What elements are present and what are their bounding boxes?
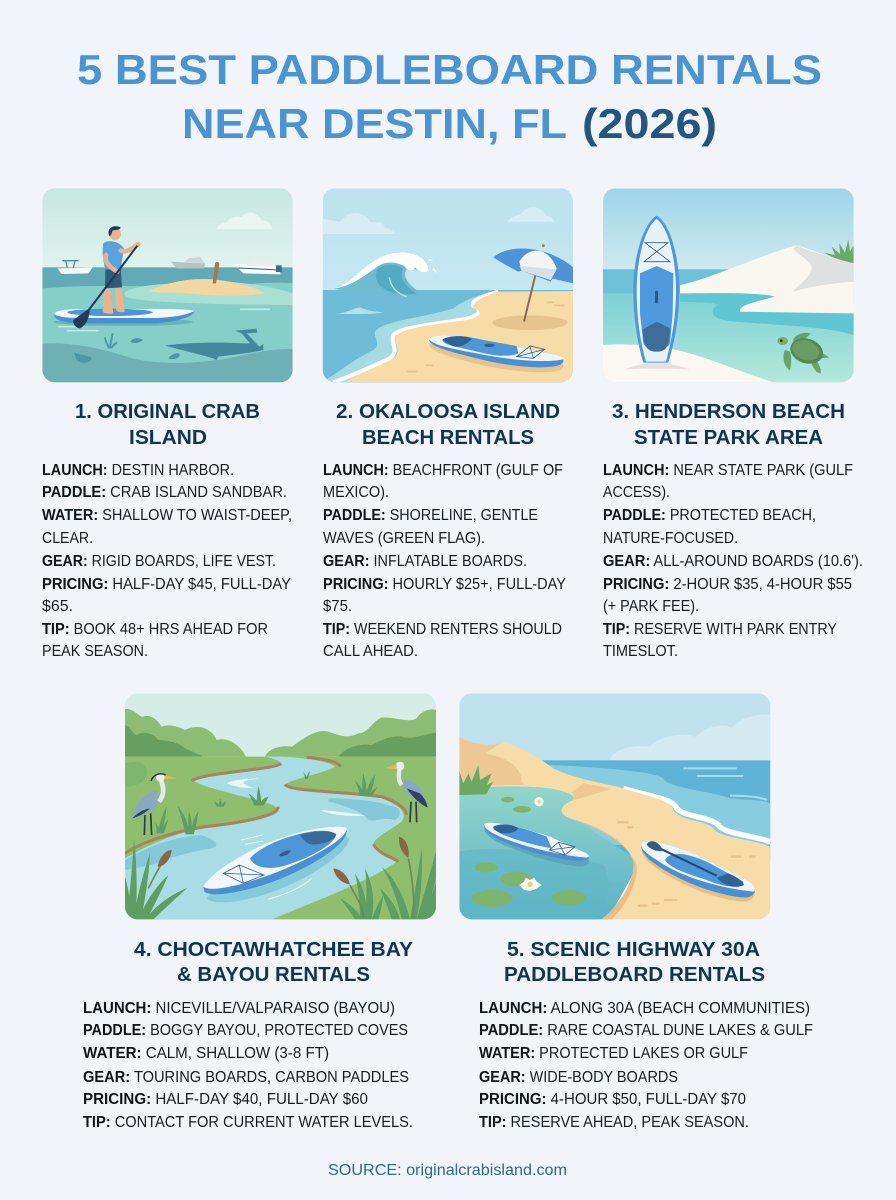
listing 5: Scenic Highway 30A xyxy=(479,938,813,1131)
details: PADDLE: CRAB ISLAND SANDBAR. xyxy=(42,484,287,501)
details: WATER: CALM, SHALLOW (3-8 FT) xyxy=(83,1045,329,1062)
heading xyxy=(134,938,413,986)
paddleboard in river xyxy=(203,827,349,902)
heron right xyxy=(384,762,428,822)
reeds and grass xyxy=(125,762,436,919)
title: (2026) xyxy=(582,100,717,147)
heron left xyxy=(132,773,178,835)
listing 4: Choctawhatchee Bay xyxy=(83,938,413,1131)
details: WAVES (GREEN FLAG). xyxy=(323,530,485,547)
details xyxy=(42,462,292,660)
paddler xyxy=(73,226,138,328)
details: TIP: RESERVE WITH PARK ENTRY xyxy=(603,621,837,638)
source credit: SOURCE: originalcrabisland.com xyxy=(328,1162,567,1179)
details: GEAR: WIDE-BODY BOARDS xyxy=(479,1069,678,1086)
sea turtle xyxy=(777,333,829,373)
details: GEAR: INFLATABLE BOARDS. xyxy=(323,553,527,570)
details: PADDLE: BOGGY BAYOU, PROTECTED COVES xyxy=(83,1022,408,1039)
details xyxy=(323,462,566,660)
listing 1: Original Crab Island xyxy=(42,400,292,660)
heading: 2. OKALOOSA ISLAND xyxy=(336,400,560,423)
listing 2: Okaloosa Island xyxy=(323,400,566,660)
details: PADDLE: SHORELINE, GENTLE xyxy=(323,507,538,524)
details: GEAR: ALL-AROUND BOARDS (10.6'). xyxy=(603,553,863,570)
details: TIP: BOOK 48+ HRS AHEAD FOR xyxy=(42,621,268,638)
details: PRICING: HALF-DAY $45, FULL-DAY xyxy=(42,576,291,593)
details: PRICING: 4-HOUR $50, FULL-DAY $70 xyxy=(479,1091,746,1108)
heading xyxy=(336,400,560,449)
details: PRICING: HALF-DAY $40, FULL-DAY $60 xyxy=(83,1091,368,1108)
details xyxy=(603,462,863,660)
heading: 4. CHOCTAWHATCHEE BAY xyxy=(134,938,413,961)
illustration: Henderson Beach dunes xyxy=(603,188,854,383)
heading xyxy=(75,400,260,449)
heading: ISLAND xyxy=(129,426,207,449)
details: LAUNCH: DESTIN HARBOR. xyxy=(42,462,234,479)
illustration: Okaloosa Island beach xyxy=(323,188,573,383)
illustration: Choctawhatchee bayou xyxy=(125,693,436,920)
paddleboard on water xyxy=(484,823,589,867)
heading xyxy=(504,938,765,986)
heading: BEACH RENTALS xyxy=(362,426,534,449)
details xyxy=(83,1000,413,1131)
details: PRICING: 2-HOUR $35, 4-HOUR $55 xyxy=(603,576,852,593)
heading: 5. SCENIC HIGHWAY 30A xyxy=(507,938,760,961)
paddleboard xyxy=(54,309,195,323)
details: $75. xyxy=(323,598,352,615)
details: PRICING: HOURLY $25+, FULL-DAY xyxy=(323,576,566,593)
details: NATURE-FOCUSED. xyxy=(603,530,738,547)
heading xyxy=(612,400,845,449)
details: PADDLE: RARE COASTAL DUNE LAKES & GULF xyxy=(479,1022,813,1039)
details: TIP: RESERVE AHEAD, PEAK SEASON. xyxy=(479,1114,749,1131)
heading: 3. HENDERSON BEACH xyxy=(612,400,845,423)
details: ACCESS). xyxy=(603,484,670,501)
upright paddleboard xyxy=(633,216,679,363)
lily pads and flowers xyxy=(471,797,586,907)
title: NEAR DESTIN, FL xyxy=(182,100,567,147)
title: 5 BEST PADDLEBOARD RENTALS xyxy=(77,46,822,93)
details: PEAK SEASON. xyxy=(42,643,148,660)
details: WATER: SHALLOW TO WAIST-DEEP, xyxy=(42,507,292,524)
details: LAUNCH: ALONG 30A (BEACH COMMUNITIES) xyxy=(479,1000,810,1017)
details: $65. xyxy=(42,598,73,615)
details: GEAR: TOURING BOARDS, CARBON PADDLES xyxy=(83,1069,409,1086)
title xyxy=(77,46,822,147)
details: MEXICO). xyxy=(323,484,389,501)
details: PADDLE: PROTECTED BEACH, xyxy=(603,507,816,524)
heading: & BAYOU RENTALS xyxy=(177,963,370,986)
details: TIMESLOT. xyxy=(603,643,678,660)
heading: 1. ORIGINAL CRAB xyxy=(75,400,260,423)
illustration: Scenic 30A dune lake xyxy=(459,693,770,922)
illustration: Crab Island paddler xyxy=(42,188,293,382)
winding river xyxy=(125,757,407,919)
heading: PADDLEBOARD RENTALS xyxy=(504,963,765,986)
details: CLEAR. xyxy=(42,530,93,547)
details: GEAR: RIGID BOARDS, LIFE VEST. xyxy=(42,553,276,570)
beach umbrella xyxy=(493,244,573,322)
paddleboard with paddle on sand xyxy=(641,841,755,902)
details: LAUNCH: BEACHFRONT (GULF OF xyxy=(323,462,563,479)
details: LAUNCH: NICEVILLE/VALPARAISO (BAYOU) xyxy=(83,1000,395,1017)
heading: STATE PARK AREA xyxy=(634,426,823,449)
details: TIP: WEEKEND RENTERS SHOULD xyxy=(323,621,562,638)
details: LAUNCH: NEAR STATE PARK (GULF xyxy=(603,462,853,479)
details xyxy=(479,1000,813,1131)
details: CALL AHEAD. xyxy=(323,643,418,660)
listing 3: Henderson Beach xyxy=(603,400,863,660)
details: (+ PARK FEE). xyxy=(603,598,699,615)
details: TIP: CONTACT FOR CURRENT WATER LEVELS. xyxy=(83,1114,413,1131)
details: WATER: PROTECTED LAKES OR GULF xyxy=(479,1045,748,1062)
inflatable board on sand xyxy=(429,336,563,372)
